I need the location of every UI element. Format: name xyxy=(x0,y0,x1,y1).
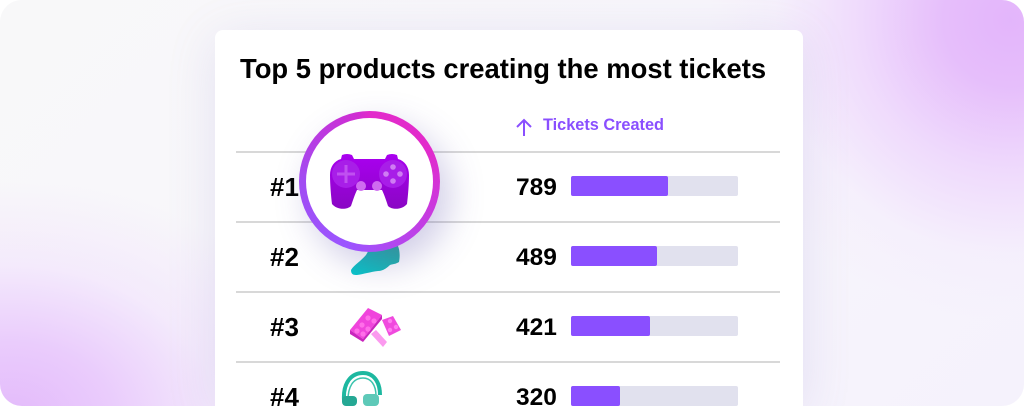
white disc xyxy=(306,118,433,245)
column header: tickets created xyxy=(516,116,664,136)
rank 1: #1 xyxy=(270,172,299,202)
icon: game controller xyxy=(330,154,409,209)
value 489: 489 xyxy=(516,244,557,271)
icon: pink bricks xyxy=(350,308,401,347)
value 789: 789 xyxy=(516,174,557,201)
rank 2: #2 xyxy=(270,242,299,272)
bar 320 xyxy=(571,386,738,406)
callout: magnified controller xyxy=(294,110,464,280)
small brick xyxy=(382,316,401,336)
large brick xyxy=(350,308,382,342)
header label: Tickets Created xyxy=(543,116,664,134)
ring xyxy=(299,111,440,252)
value 421: 421 xyxy=(516,314,557,341)
tiny brick xyxy=(371,330,387,347)
icon: teal shoe xyxy=(351,246,400,275)
bar 421 xyxy=(571,316,738,336)
bar 789 xyxy=(571,176,738,196)
icon: teal headphones xyxy=(342,371,382,406)
bar 489 xyxy=(571,246,738,266)
title: Top 5 products creating the most tickets xyxy=(240,53,766,84)
rank 3: #3 xyxy=(270,312,299,342)
panel: card xyxy=(215,30,803,406)
icon: up arrow xyxy=(516,118,532,136)
